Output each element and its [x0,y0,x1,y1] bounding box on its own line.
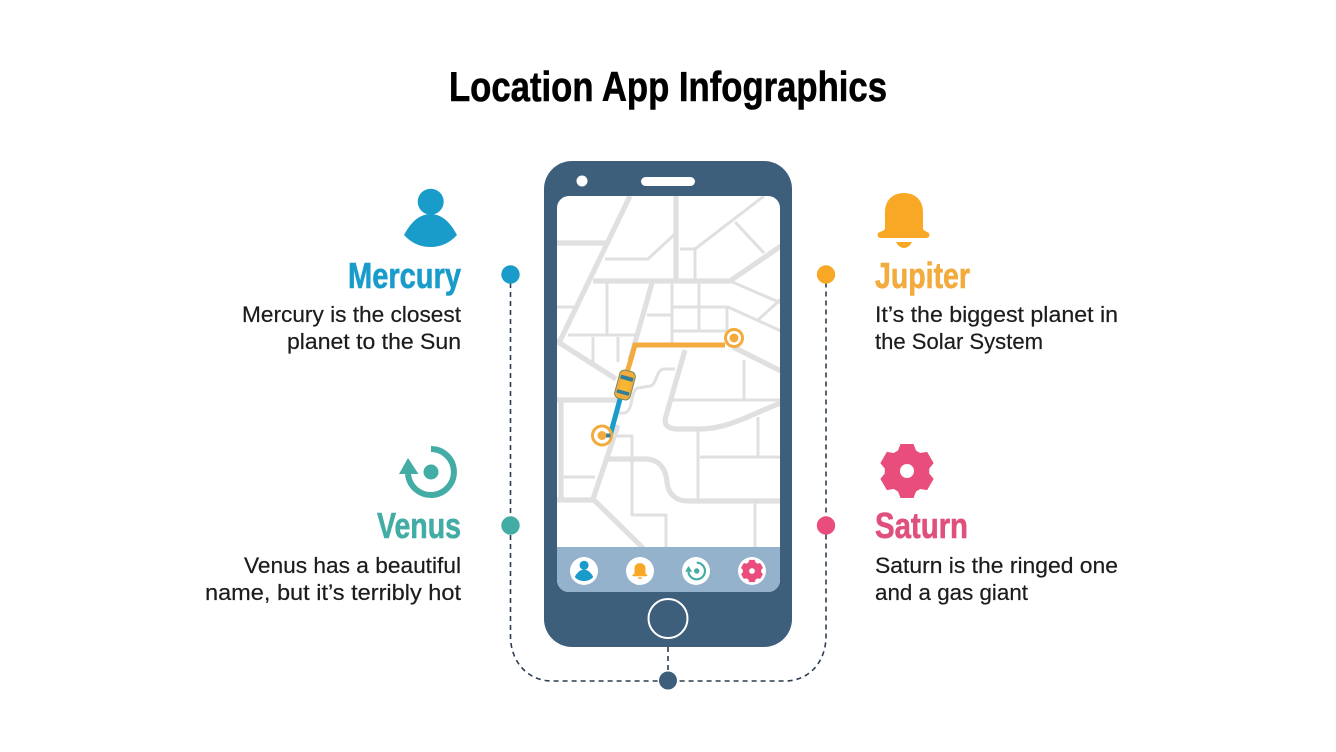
speaker [641,177,695,186]
map roads [555,196,781,548]
tab icon: bell [626,557,654,585]
car [614,369,636,401]
home button [648,599,688,638]
connector dot: Mercury [501,265,520,284]
text: Venus description: name, but it’s terribly hot [205,580,462,605]
text: Jupiter description: the Solar System [875,329,1043,354]
title: Location App Infographics [449,63,887,110]
panel: Mercury [242,189,520,354]
text: Mercury description [242,302,462,354]
icon: refresh [399,449,454,495]
text: Mercury description: Mercury is the closest [242,302,462,327]
phone [544,161,792,647]
heading: Jupiter: Jupiter [875,255,970,296]
text: Saturn description [875,553,1118,605]
panel: Venus [205,449,520,605]
connector dot: Jupiter [817,265,835,284]
tab icon: profile [570,557,598,585]
tab icon: refresh [682,557,710,585]
tab icon: settings [738,557,766,585]
panel: Saturn [817,444,1118,605]
connector dot: Venus [501,516,520,535]
text: Saturn description: and a gas giant [875,580,1029,605]
heading: Venus: Venus [377,505,461,546]
route: travelled (blue) [610,398,622,435]
icon: bell [878,193,929,248]
text: Jupiter description [875,302,1118,354]
map screen [555,196,781,592]
heading: Mercury: Mercury [348,255,461,296]
text: Mercury description: planet to the Sun [287,329,461,354]
text: Venus description [205,553,462,605]
start marker [592,426,612,445]
text: Jupiter description: It’s the biggest planet in [875,302,1118,327]
dashed connector [510,283,826,681]
bottom app bar [557,547,780,592]
panel: Jupiter [817,193,1118,354]
route: remaining (orange) [625,342,725,371]
heading: Saturn: Saturn [875,505,968,546]
icon: gear [880,444,934,498]
connector dot: bottom [659,672,677,690]
destination marker [726,330,742,346]
phone body [544,161,792,647]
connector dot: Saturn [817,516,835,535]
text: Venus description: Venus has a beautiful [244,553,461,578]
icon: person [404,189,457,247]
camera [576,176,588,186]
text: Saturn description: Saturn is the ringed one [875,553,1118,578]
